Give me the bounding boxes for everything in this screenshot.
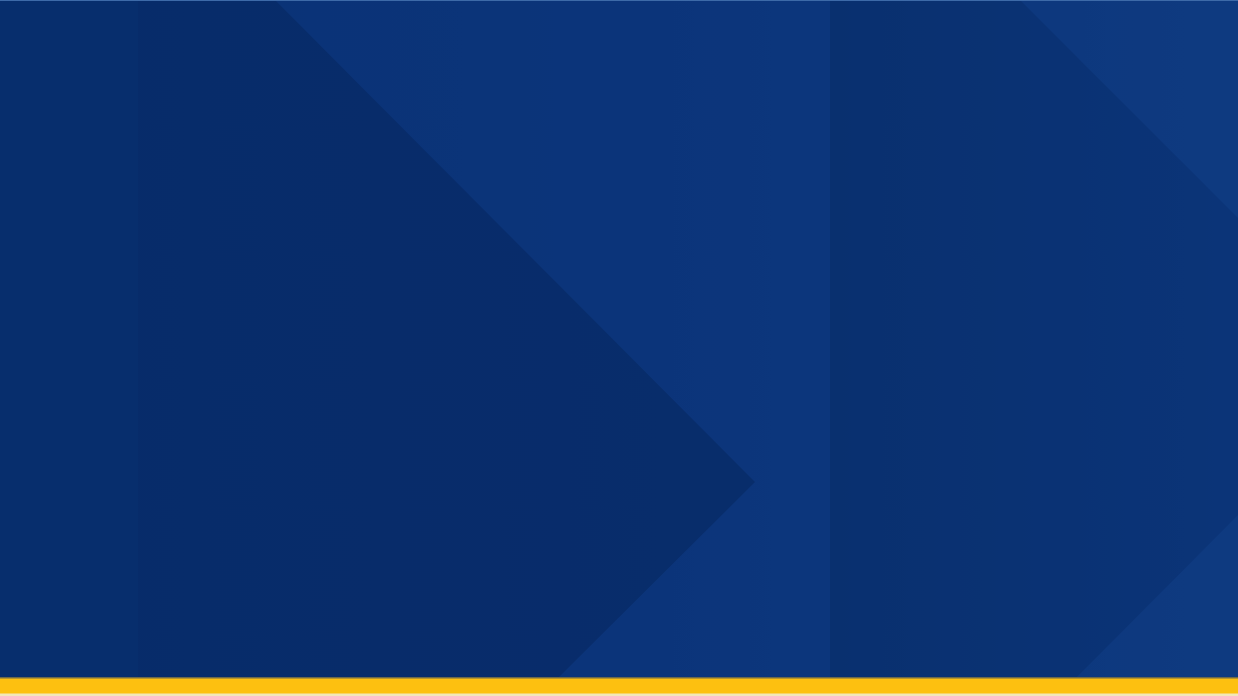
yellow bottom bar xyxy=(0,677,1238,696)
top edge line xyxy=(0,0,1238,1)
left chevron shape xyxy=(0,0,755,679)
right chevron shape xyxy=(830,0,1238,679)
